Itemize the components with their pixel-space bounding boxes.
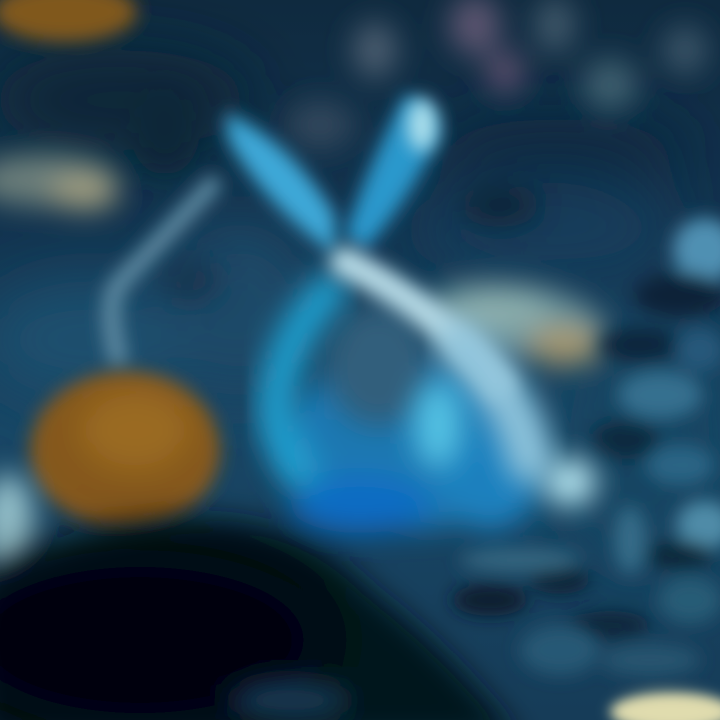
- top purple bokeh dots: [286, 0, 707, 149]
- white band: [345, 262, 500, 385]
- dark lower-right texture: [452, 548, 600, 675]
- dark foreground hump: [0, 520, 520, 720]
- right side dots: [570, 218, 720, 676]
- grey centre: [326, 303, 430, 427]
- wing highlight: [408, 99, 436, 151]
- background tonal patches: [0, 50, 720, 570]
- right tip highlight: [544, 458, 596, 506]
- blue body: [280, 360, 540, 533]
- top-left orange blob: [0, 0, 137, 42]
- bottom-right cream blob: [610, 692, 720, 720]
- dark patches: [130, 85, 540, 302]
- cream oval right of ribbon: [421, 272, 609, 368]
- inner bright patch: [414, 381, 462, 469]
- ribbon figure: [225, 95, 596, 533]
- left blue stroke: [275, 290, 330, 470]
- right ribbon wing: [345, 95, 440, 250]
- left ribbon wing: [225, 112, 335, 255]
- left pale blob: [0, 473, 34, 577]
- left cream blob: [0, 154, 119, 210]
- orange sphere: [30, 372, 220, 528]
- thin curved line: [112, 185, 212, 358]
